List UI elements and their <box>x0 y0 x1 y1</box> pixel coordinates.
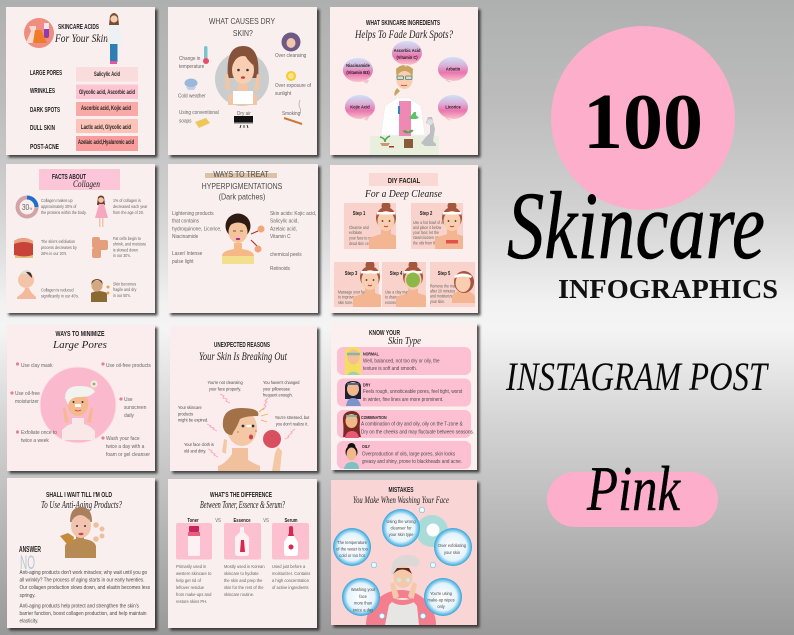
speech bubbles: Niacinamide <box>346 63 370 68</box>
column: essence: skin for the rest of the <box>224 585 264 590</box>
answer text: Our collagen production slows down, and elastin becomes less <box>19 585 150 591</box>
causes text: Over cleansing <box>275 53 306 59</box>
skin type: normal: NORMAL <box>363 351 379 357</box>
heading: Between Toner, Essence & Serum? <box>200 500 285 511</box>
heading <box>354 18 453 41</box>
causes text: temperature <box>179 64 204 70</box>
mistake bubbles: cold or too hot <box>339 553 365 558</box>
skin type: normal: Well, balanced, not too dry or oily, the <box>363 358 440 365</box>
big number badge <box>551 26 735 210</box>
skin type: dry: in winter, fine lines are more prominent. <box>363 397 443 403</box>
collagen facts text: fragile and dry <box>113 287 137 292</box>
reasons text <box>178 380 310 453</box>
mistake bubbles: twice a day <box>353 607 374 612</box>
acid table: DARK SPOTS <box>30 107 60 114</box>
reasons text: You're not cleansing <box>207 380 243 385</box>
heading: MISTAKES <box>388 487 414 494</box>
panel: facts about collagen <box>6 164 155 313</box>
causes text: Change in <box>179 56 200 62</box>
causes text: Dry air <box>237 111 251 117</box>
big number badge: 100 <box>583 79 703 166</box>
acid table: LARGE PORES <box>30 70 62 77</box>
skin type: normal <box>337 347 471 375</box>
heading: HYPERPIGMENTATIONS <box>202 181 282 191</box>
column: toner <box>176 518 212 604</box>
heading: WHAT'S THE DIFFERENCE <box>210 490 272 499</box>
mistake bubbles: Over exfoliating <box>438 543 466 548</box>
column: essence: Essence <box>234 518 251 523</box>
heading: SKIN? <box>233 28 253 38</box>
heading <box>369 328 421 347</box>
mistake bubbles: Washing your <box>351 587 375 592</box>
column: toner: western skincare to <box>176 571 212 576</box>
tips: Exfoliate once to <box>21 430 57 436</box>
panel: what causes dry skin <box>168 7 317 155</box>
answer text: springy. <box>19 592 36 599</box>
collagen facts text: in our 50's. <box>113 293 131 298</box>
reasons text: old and dirty. <box>184 448 206 453</box>
chart: thirty percent donut: 30% <box>22 202 33 212</box>
step 2: your face; let the <box>413 230 439 235</box>
heading: WHAT CAUSES DRY <box>209 16 275 26</box>
heading: FACTS ABOUT <box>52 172 86 181</box>
heading: (Dark patches) <box>219 192 266 202</box>
step 1: your face to remove <box>349 235 380 241</box>
column: serum: Serum <box>284 518 298 523</box>
treatment lists: Skin acids: Kojic acid, <box>270 211 316 217</box>
illustration: scientist and lab bench <box>370 65 439 155</box>
tips: foam or gel cleanser <box>106 452 150 458</box>
mistake bubbles: You're using <box>430 591 452 596</box>
heading: Your Skin Is Breaking Out <box>199 351 288 363</box>
reasons text: you don't realize it. <box>276 421 308 426</box>
tips: Wash your face <box>106 436 140 442</box>
skin type: dry: DRY <box>363 382 371 388</box>
heading: Collagen <box>73 180 100 190</box>
collagen facts text: Fat cells begin to <box>113 236 141 241</box>
tips <box>10 362 151 458</box>
illustration: skin cross-section <box>14 238 33 258</box>
heading <box>54 22 108 45</box>
answer: NO <box>20 553 35 574</box>
step 1: dead skin cells. <box>349 241 373 246</box>
icon: sun <box>286 71 296 81</box>
heading: SKINCARE ACIDS <box>58 22 99 31</box>
icon: cloud <box>184 78 198 90</box>
treatment lists <box>172 211 316 272</box>
collagen facts text: in our 30's. <box>113 253 131 258</box>
mistake bubbles: The temperature <box>337 540 367 545</box>
icon: over cleansing <box>282 32 300 52</box>
panel: face washing mistakes <box>331 480 477 625</box>
panel: diy facial <box>330 165 478 313</box>
heading: WAYS TO TREAT <box>213 169 269 179</box>
skin type: oily: OILY <box>362 444 370 449</box>
step 2: the oils from the pores. <box>413 240 449 246</box>
causes text: Over exposure of <box>275 83 311 89</box>
panel: skincare acids <box>6 7 155 155</box>
mistake bubbles: only <box>437 604 445 609</box>
answer text: Anti-aging products don't work miracles; why wait until you go <box>19 570 147 576</box>
icon: doctor figure <box>107 13 122 64</box>
step 5 <box>430 262 475 307</box>
answer: ANSWER <box>19 545 41 554</box>
tips: daily <box>124 413 134 419</box>
collagen facts text: 1% of collagen is <box>113 198 141 203</box>
collagen facts text: is slowed down <box>113 247 138 252</box>
reasons text: your pillowcase <box>263 386 290 391</box>
answer text: all wrinkly? The process of aging starts in our early twenties. <box>19 577 145 584</box>
column: serum: a high concentration <box>272 578 309 583</box>
mistake bubbles: your skin type <box>389 532 414 537</box>
heading: WHAT SKINCARE INGREDIENTS <box>366 18 440 27</box>
heading: For Your Skin <box>54 33 108 45</box>
step 2: Use a hot bowl of water <box>413 220 450 225</box>
mistake bubbles: more than <box>354 600 373 606</box>
step 1: Step 1 <box>353 211 366 216</box>
mistake bubbles: make-up wipes <box>428 597 455 603</box>
step 4: Step 4 <box>390 271 403 276</box>
tips: Use clay mask <box>21 363 53 369</box>
acid table: Salicylic Acid <box>94 72 120 78</box>
speech bubbles: Ascorbic Acid <box>394 48 420 53</box>
step 3 <box>334 262 381 307</box>
acid table: WRINKLES <box>30 88 55 95</box>
step 2: Step 2 <box>420 211 433 216</box>
column: essence: skincare to hydrate <box>224 571 259 576</box>
vs marker: VS <box>215 518 221 523</box>
heading <box>202 169 282 202</box>
step 3: to improve your <box>338 294 363 300</box>
reasons text: You're stressed, but <box>275 415 309 420</box>
collagen facts text: process decreases by <box>41 245 78 250</box>
column: serum: of active ingredients <box>272 585 309 590</box>
tips: Use <box>124 397 133 403</box>
heading <box>41 490 122 511</box>
icon: soap <box>195 118 210 128</box>
column: essence <box>224 518 265 597</box>
skin type: oily <box>337 441 471 469</box>
column: toner: from make-ups and <box>176 592 212 597</box>
treatment lists: hydroquinone, Licorice, <box>172 226 221 233</box>
heading <box>52 329 107 351</box>
acid table: Ascorbic acid, Kojic acid <box>81 106 131 112</box>
icon: dry air device <box>234 116 253 128</box>
tips: moisturizer <box>15 399 39 405</box>
heading <box>39 169 120 190</box>
arrows: squiggles <box>207 394 295 457</box>
heading <box>199 340 288 363</box>
reasons text: Your skincare <box>178 405 202 410</box>
step 1 <box>344 203 396 249</box>
heading <box>364 173 442 200</box>
mistake bubbles: cleanser for <box>391 525 412 531</box>
mistake bubbles: Using the wrong <box>387 519 416 524</box>
step 3: Massage your face <box>338 289 368 295</box>
acid table: POST-ACNE <box>30 144 59 151</box>
step 3: skin tone. <box>338 300 353 305</box>
tips: sunscreen <box>124 405 146 411</box>
heading: To Use Anti-Aging Products? <box>41 500 122 511</box>
causes text: Cold weather <box>178 93 206 100</box>
step 2 <box>411 203 463 249</box>
column: essence: Mostly used in Korean <box>224 564 265 569</box>
answer text: Anti-aging products help protect and strengthen the skin's <box>19 603 139 610</box>
reasons text: your face properly. <box>209 386 241 392</box>
acid table <box>30 67 138 151</box>
treatment lists: pulse light <box>172 259 194 265</box>
illustration: woman in forties <box>17 270 36 299</box>
step 1: Cleanse and <box>349 225 369 230</box>
heading <box>353 487 449 506</box>
column: toner: restore skins PH. <box>176 599 207 604</box>
step 2: steam loosen up <box>413 235 439 240</box>
collagen facts text: significantly in our 40's. <box>41 293 79 299</box>
step 2: and place it below <box>413 225 441 230</box>
speech bubbles: (Vitamin C) <box>396 55 418 60</box>
treatment lists: Retinoids <box>270 266 290 272</box>
collagen facts text: approximately 30% of <box>41 204 77 209</box>
vs marker: VS <box>263 518 269 523</box>
acid table: Glycolic acid, Ascorbic acid <box>79 90 135 96</box>
mistake bubbles: face <box>359 593 367 599</box>
mistake bubbles: of the water is too <box>336 546 368 552</box>
column: essence: the skin and prep the <box>224 578 263 583</box>
step 5: your skin. <box>430 299 445 304</box>
step 4: to draw out <box>385 294 403 300</box>
reasons text: Your face cloth is <box>184 442 214 447</box>
collagen facts text: from the age of 20. <box>113 210 144 215</box>
panel: know your skin type <box>331 323 477 470</box>
subtitle: infographics: INFOGRAPHICS <box>558 274 778 304</box>
reasons text: You haven't changed <box>263 380 300 385</box>
panel: ways to treat hyperpigmentation <box>168 164 318 313</box>
illustration: fat cells <box>92 237 108 258</box>
chart: thirty percent donut <box>18 198 36 216</box>
mistake bubbles: your skin <box>444 550 461 555</box>
causes text: Smoking <box>282 111 300 117</box>
skin type: dry <box>337 378 471 406</box>
heading: Large Pores <box>52 339 107 351</box>
panel: toner essence serum <box>168 479 317 628</box>
illustration: woman with dark patches <box>222 214 264 264</box>
step 4: Use a clay mask <box>385 289 411 295</box>
treatment lists: Salicylic acid, <box>270 218 299 225</box>
step 5: Step 5 <box>438 271 451 276</box>
step 5: and moisturize <box>430 293 453 299</box>
column: toner: help get rid of <box>176 578 202 583</box>
treatment lists: Niacinamide <box>172 234 198 240</box>
step 1: exfoliate <box>349 230 362 235</box>
acid table: DULL SKIN <box>30 125 55 132</box>
illustration: woman with mirror <box>218 408 282 471</box>
panel: ways to minimize large pores <box>7 325 155 471</box>
collagen facts text: 28% in our 20's. <box>41 251 67 256</box>
heading: Helps To Fade Dark Spots? <box>354 27 453 41</box>
step 4 <box>382 262 426 307</box>
column: serum: moisturizer. Contains <box>272 571 311 576</box>
treatment lists: Azelaic acid, <box>270 226 297 233</box>
skin type: combination: Dry on the cheeks and may fluctuate between seasons. <box>361 429 474 436</box>
collagen facts text: Skin becomes <box>113 281 136 287</box>
illustration: aging woman <box>60 507 104 558</box>
illustration: girl <box>95 196 108 227</box>
illustration: woman with dry skin <box>215 46 269 106</box>
step 5: after 20 minutes <box>430 288 455 294</box>
heading <box>200 490 285 511</box>
reasons text: frequent enough. <box>263 392 293 398</box>
panel: unexpected reasons <box>170 326 317 471</box>
causes text <box>178 53 311 125</box>
pill: pink: Pink <box>586 453 681 524</box>
speech bubbles: Licorice <box>445 104 461 110</box>
collagen facts text: decreased each year <box>113 204 148 209</box>
speech bubbles: (Vitamin B3) <box>346 70 370 75</box>
reasons text: products <box>178 411 193 416</box>
causes text: Using conventional <box>179 110 219 116</box>
treatment lists: chemical peels <box>270 252 302 258</box>
skin type: dry: Feels rough, unnoticeable pores, feel tight, worst <box>363 389 462 395</box>
skin type: oily: Overproduction of oils, large pores, skin looks <box>362 451 455 458</box>
speech bubbles <box>343 41 468 121</box>
column: serum: Used just before a <box>272 564 305 569</box>
tips: Use oil-free products <box>106 363 151 369</box>
column: toner: leftover residue <box>176 585 205 590</box>
step 3: Step 3 <box>345 271 358 276</box>
icon: thermometer <box>203 46 209 64</box>
acid table: Lactic acid, Glycolic acid <box>81 125 131 131</box>
heading: UNEXPECTED REASONS <box>214 340 270 349</box>
illustration: woman in fifties <box>91 279 110 302</box>
treatment lists: Vitamin C <box>270 234 291 240</box>
reasons text: might be expired. <box>178 417 208 423</box>
collagen facts text: Collagen makes up <box>41 198 73 203</box>
column: essence: skincare routine. <box>224 592 254 597</box>
illustration: woman washing face <box>366 515 448 625</box>
step 5: Remove the mask <box>430 283 458 289</box>
skin type: combination: COMBINATION <box>361 415 387 420</box>
causes text: sunlight <box>275 91 292 97</box>
treatment lists: that contains <box>172 218 199 225</box>
speech bubbles: Arbutin <box>446 66 460 72</box>
collagen facts text: shrink, and moisture <box>113 241 147 247</box>
column: serum <box>272 518 311 590</box>
panel: dark spot ingredients <box>330 7 478 155</box>
tips: Use oil-free <box>15 391 40 397</box>
pill: pink <box>547 453 718 527</box>
causes text: soaps <box>179 118 192 125</box>
panel: anti-aging products <box>7 478 155 628</box>
treatment lists: Laser/ Intense <box>172 251 202 257</box>
tips: twice a day with a <box>106 444 144 450</box>
answer text: barrier function, boost collagen production, and help maintain <box>19 611 147 617</box>
skin type: combination <box>337 410 474 438</box>
collagen facts text <box>41 198 148 299</box>
heading: SHALL I WAIT TILL I'M OLD <box>46 490 112 499</box>
skin type: normal: texture is soft and smooth. <box>363 366 417 372</box>
heading: For a Deep Cleanse <box>364 188 442 200</box>
answer text: elasticity. <box>19 618 38 625</box>
illustration: woman with nose strip <box>40 367 116 443</box>
speech bubbles: Kojic Acid <box>350 104 370 110</box>
answer <box>19 545 41 574</box>
column: toner: Toner <box>187 518 199 523</box>
heading: WAYS TO MINIMIZE <box>56 329 104 338</box>
step 4: excess oils. <box>385 300 403 305</box>
heading: DIY FACIAL <box>388 178 420 185</box>
heading: KNOW YOUR <box>369 328 401 337</box>
icon: lab flasks <box>24 18 54 48</box>
mistake bubbles <box>333 507 472 619</box>
collagen facts text: Collagen is reduced <box>41 287 74 293</box>
heading: Skin Type <box>388 336 421 347</box>
acid table: Azelaic acid,Hyaluronic acid <box>78 140 134 146</box>
heading: You Make When Washing Your Face <box>353 496 449 506</box>
treatment lists: Lightening products <box>172 211 214 217</box>
tips: twice a week <box>21 438 49 444</box>
skin type: combination: A combination of dry and oily, oily on the T-zone & <box>361 421 463 428</box>
collagen facts text: The skin's exfoliation <box>41 239 75 244</box>
column: toner: Primarily used in <box>176 564 206 569</box>
skin type: oily: greasy and shiny, prone to blackheads and acne. <box>362 459 462 465</box>
collagen facts text: the proteins within the body. <box>41 210 87 215</box>
icon: cigarette <box>284 100 302 124</box>
